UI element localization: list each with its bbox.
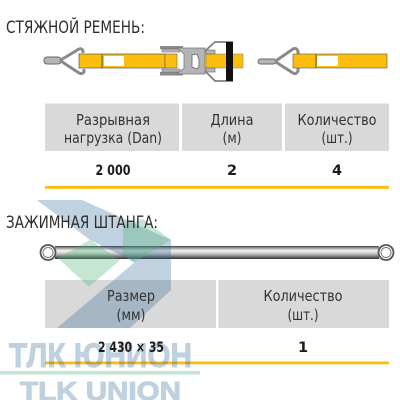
watermark: TLK Union logo: [0, 200, 200, 400]
column: length: (м): [222, 129, 242, 147]
logo text: Russian: ТЛК ЮНИОН: [9, 337, 192, 375]
text: size column: [98, 287, 164, 356]
column: quantity: (шт.): [288, 306, 318, 324]
column: breaking load: 2 000: [96, 163, 130, 179]
table: strap specifications: [45, 104, 389, 179]
column: quantity: [285, 104, 389, 179]
column: length: [182, 104, 282, 179]
column: breaking load: Разрывная: [76, 111, 150, 129]
column: length: Длина: [210, 111, 254, 129]
column: quantity: (шт.): [322, 129, 352, 147]
column: quantity: 1: [298, 340, 308, 356]
text: size column: Размер: [107, 287, 155, 305]
logo mark: [37, 200, 171, 328]
column: length: 2: [227, 163, 237, 179]
clamping bar: [40, 245, 394, 260]
column: breaking load: нагрузка (Dan): [64, 129, 162, 147]
heading: clamping bar: ЗАЖИМНАЯ ШТАНГА:: [6, 213, 158, 232]
heading: ratchet strap: СТЯЖНОЙ РЕМЕНЬ:: [6, 18, 145, 37]
column: breaking load: [45, 104, 179, 179]
text: size column: 2 430 × 35: [98, 340, 164, 356]
table: bar specifications: [45, 280, 389, 356]
column: quantity: Количество: [264, 287, 342, 305]
column: quantity: Количество: [298, 111, 376, 129]
right strap with hook: [258, 48, 387, 74]
text: size column: (мм): [116, 306, 146, 324]
ratchet buckle: [160, 42, 243, 81]
column: quantity: 4: [332, 163, 342, 179]
left strap with hook: [44, 49, 165, 74]
column: quantity: [218, 280, 389, 356]
column: size background: [45, 280, 216, 328]
